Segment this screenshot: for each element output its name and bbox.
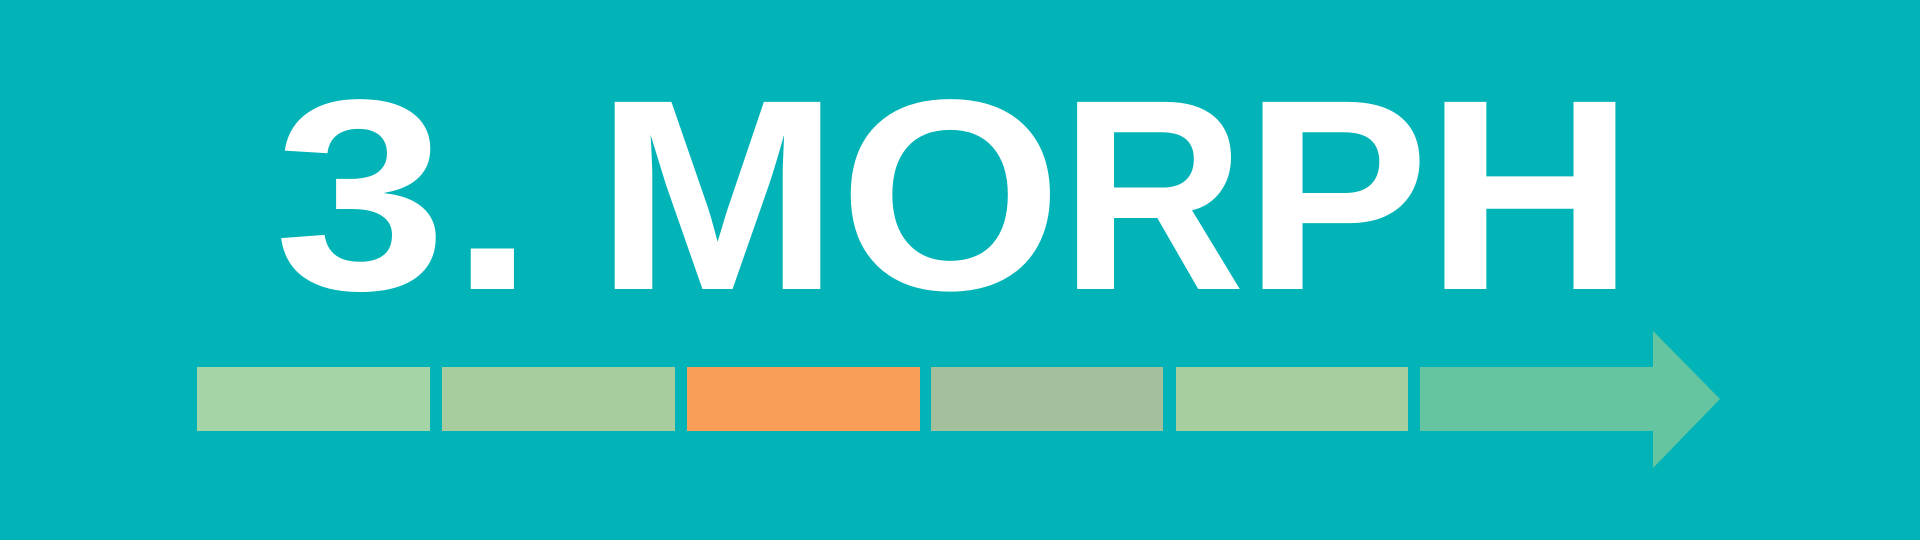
progress bar segments xyxy=(197,367,1408,431)
title: R xyxy=(1060,43,1245,347)
title: H xyxy=(1425,43,1635,347)
title: . xyxy=(450,43,535,347)
arrow xyxy=(1420,331,1720,468)
title: P xyxy=(1244,43,1429,347)
title: M xyxy=(595,43,840,347)
title: 3 xyxy=(274,43,447,347)
title: O xyxy=(839,43,1062,347)
title xyxy=(274,43,1635,347)
current step segment xyxy=(687,367,920,431)
